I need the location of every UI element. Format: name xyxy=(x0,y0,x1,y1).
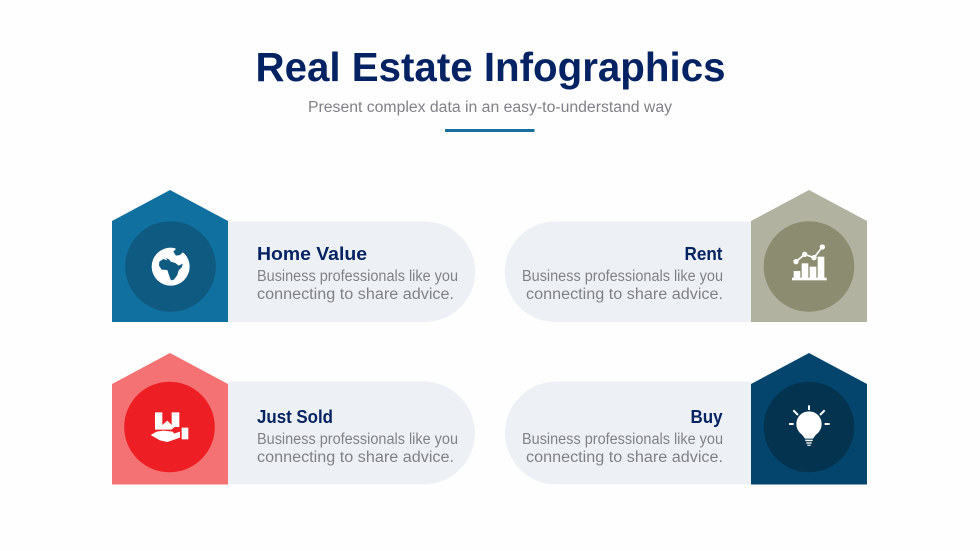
description xyxy=(257,268,458,303)
title underline xyxy=(445,129,534,132)
text pill xyxy=(505,222,751,322)
icon circle xyxy=(125,221,216,312)
description: Business professionals like you xyxy=(522,431,723,448)
description: connecting to share advice. xyxy=(526,449,723,466)
panel: rent xyxy=(505,190,867,322)
house shape xyxy=(112,190,228,322)
description: connecting to share advice. xyxy=(257,286,454,303)
house shape xyxy=(751,353,867,484)
icon: bar chart xyxy=(792,244,827,280)
description: Business professionals like you xyxy=(257,431,458,448)
description: connecting to share advice. xyxy=(526,286,723,303)
icon circle xyxy=(124,382,215,472)
description: Business professionals like you xyxy=(257,268,458,285)
text pill xyxy=(505,382,751,484)
heading: Rent xyxy=(684,243,722,264)
panel: home value xyxy=(112,190,475,322)
panel: just sold xyxy=(112,353,475,484)
description: Business professionals like you xyxy=(522,268,723,285)
heading: Just Sold xyxy=(257,406,333,427)
description xyxy=(522,268,723,303)
icon: light bulb xyxy=(789,405,830,446)
heading: Home Value xyxy=(257,243,367,264)
icon circle xyxy=(764,221,854,312)
heading: Buy xyxy=(690,406,723,427)
description xyxy=(257,431,458,466)
text pill xyxy=(228,382,475,484)
house shape xyxy=(751,190,867,322)
subtitle: Present complex data in an easy-to-understand way xyxy=(308,99,672,116)
text pill xyxy=(228,222,475,322)
icon: globe xyxy=(152,245,191,286)
title: Real Estate Infographics xyxy=(256,44,726,90)
description xyxy=(522,431,723,466)
icon: hand holding house xyxy=(151,412,188,442)
icon circle xyxy=(764,382,854,472)
house shape xyxy=(112,353,228,484)
panel: buy xyxy=(505,353,867,484)
description: connecting to share advice. xyxy=(257,449,454,466)
